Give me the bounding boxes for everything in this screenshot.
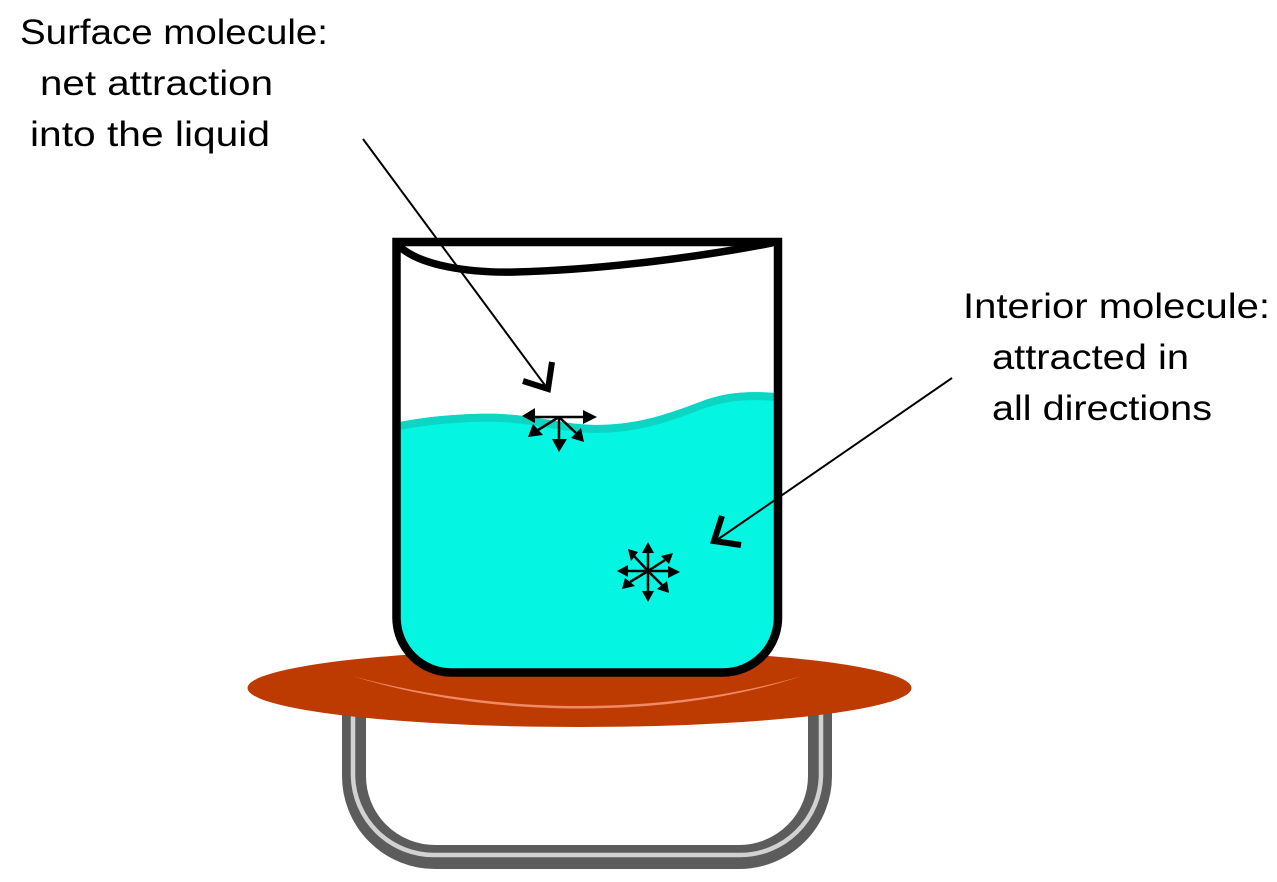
label: interior molecule (963, 287, 1270, 428)
beaker rim curve (399, 243, 772, 272)
label: interior molecule: Interior molecule: (963, 287, 1270, 326)
liquid body (400, 392, 775, 669)
label: interior molecule: attracted in (992, 338, 1189, 377)
stand: support ring handle (353, 700, 821, 857)
beaker with liquid (396, 242, 778, 672)
label: surface molecule: net attraction (40, 64, 273, 103)
beaker outline (396, 242, 778, 672)
arrow to interior molecule (714, 378, 952, 545)
label: surface molecule: into the liquid (30, 115, 270, 154)
stand: rust-coloured plate (248, 649, 912, 727)
label: interior molecule: all directions (992, 389, 1212, 428)
interior molecule force arrows (617, 542, 680, 602)
label: surface molecule (20, 13, 328, 154)
arrow to surface molecule (363, 139, 552, 389)
surface molecule force arrows (522, 408, 597, 452)
label: surface molecule: Surface molecule: (20, 13, 328, 52)
liquid surface band (400, 392, 775, 433)
